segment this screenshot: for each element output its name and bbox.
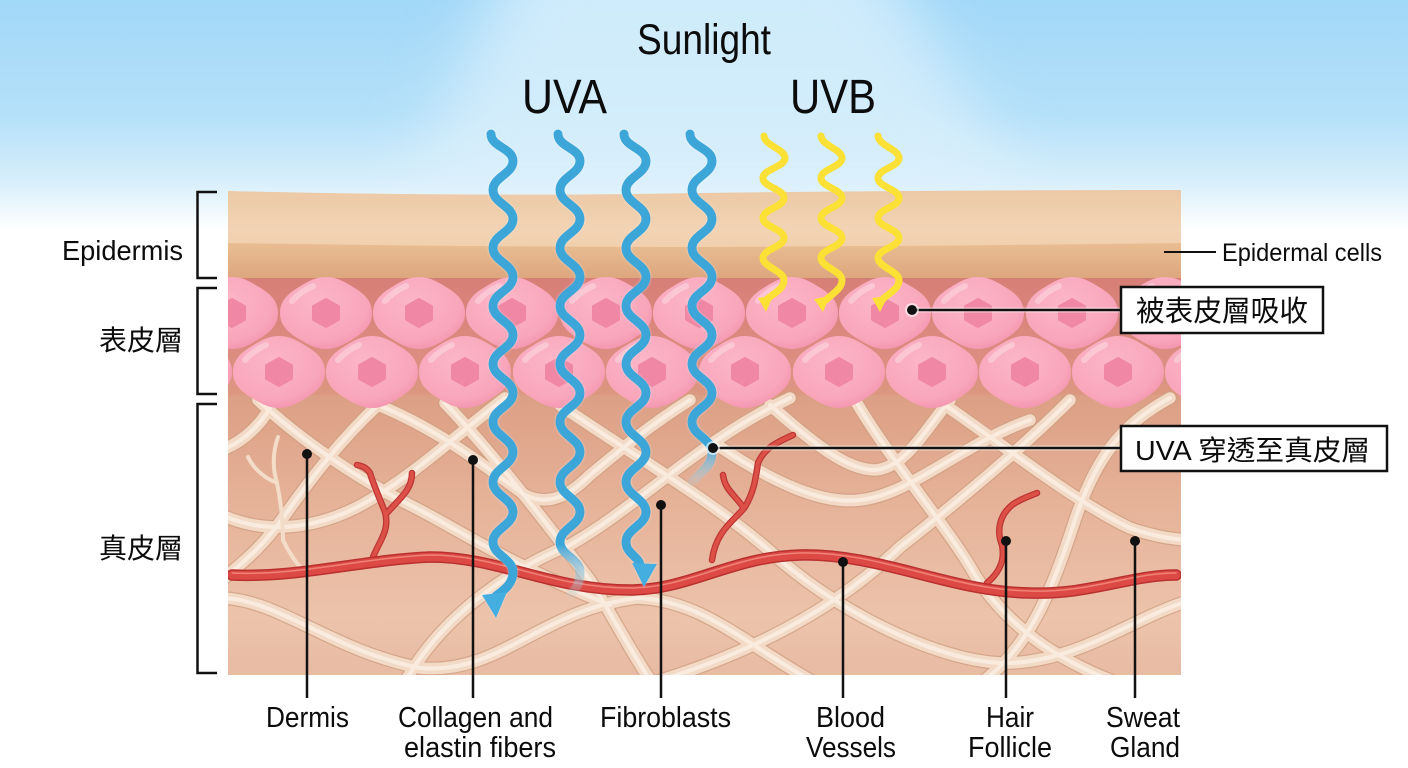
heading: UVB: UVB xyxy=(790,71,876,124)
label: Collagen and elastin fibers: elastin fibers xyxy=(404,732,556,764)
epidermal cells, lower row xyxy=(228,336,1181,408)
UVB ray 2 xyxy=(814,136,842,312)
callout: Epidermal cells: Epidermal cells xyxy=(1222,239,1382,267)
bracket: 表皮層 xyxy=(198,288,217,394)
pointer: Blood Vessels xyxy=(838,557,848,698)
UVA ray 3, arrowhead at blood vessel xyxy=(624,134,657,587)
pointer: Dermis xyxy=(302,449,312,698)
label: Hair Follicle xyxy=(968,702,1052,764)
epidermal cells, upper row xyxy=(186,277,1211,349)
UVA ray 1, reaches deep dermis xyxy=(482,134,513,618)
label: Hair Follicle: Hair xyxy=(986,702,1034,734)
label: Collagen and elastin fibers: Collagen and xyxy=(398,702,553,734)
label: Sweat Gland xyxy=(1106,702,1180,764)
label: Blood Vessels: Vessels xyxy=(806,732,896,764)
label: Hair Follicle: Follicle xyxy=(968,732,1052,764)
label: Sweat Gland: Gland xyxy=(1110,732,1180,764)
sky background xyxy=(0,0,1408,230)
label: Blood Vessels xyxy=(806,702,896,764)
heading: UVA: UVA xyxy=(522,71,607,124)
callout: absorbed by epidermis: 被表皮層吸收 xyxy=(1136,295,1308,328)
UVA ray 2, fades at blood vessel xyxy=(558,134,580,594)
pointer: Collagen and elastin fibers xyxy=(468,455,478,698)
panel: skin cross-section xyxy=(228,190,1181,675)
epidermis lower layer xyxy=(228,243,1181,278)
UVA rays xyxy=(482,134,712,618)
cell layer background xyxy=(228,278,1181,403)
collagen and elastin fibers xyxy=(222,398,1185,682)
pointer: Hair Follicle xyxy=(1001,536,1011,698)
UVB rays xyxy=(758,136,899,312)
pointer: Fibroblasts xyxy=(656,500,666,698)
label: Dermis: Dermis xyxy=(266,702,349,734)
label: Sweat Gland: Sweat xyxy=(1106,702,1180,734)
label: Blood Vessels: Blood xyxy=(816,702,885,734)
epidermis surface layer xyxy=(228,190,1181,247)
label: Epidermis: Epidermis xyxy=(62,235,183,266)
label: 真皮層: 真皮層 xyxy=(99,533,183,564)
UVB ray 3 xyxy=(872,136,899,312)
label: Collagen and elastin fibers xyxy=(398,702,556,764)
UVA ray 4, fades in upper dermis xyxy=(690,134,712,482)
callout: UVA reaches dermis xyxy=(706,426,1387,471)
bracket: 真皮層 xyxy=(198,404,217,673)
callout: absorbed by epidermis xyxy=(905,287,1323,333)
bracket: Epidermis xyxy=(198,192,217,278)
dermis background xyxy=(228,395,1181,675)
label: Fibroblasts: Fibroblasts xyxy=(600,702,731,734)
label: 表皮層: 表皮層 xyxy=(99,325,183,356)
callout: UVA reaches dermis: UVA 穿透至真皮層 xyxy=(1135,435,1370,466)
pointer: Sweat Gland xyxy=(1130,536,1140,698)
title: Sunlight: Sunlight xyxy=(637,16,771,64)
UVB ray 1 xyxy=(758,136,785,312)
blood vessel xyxy=(232,435,1176,593)
